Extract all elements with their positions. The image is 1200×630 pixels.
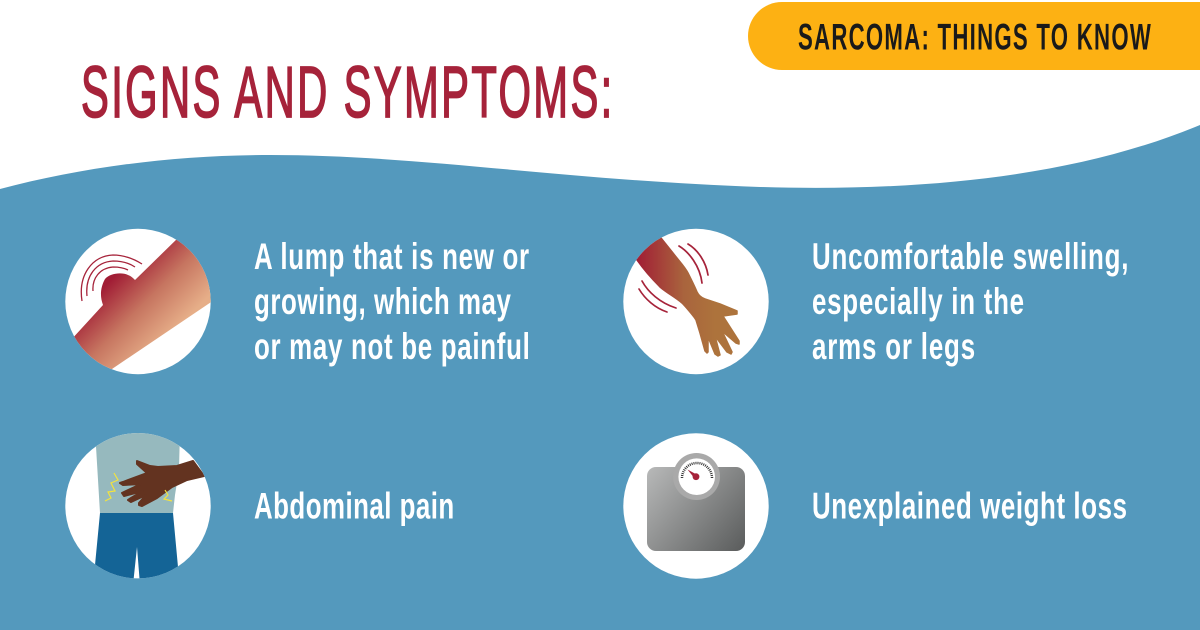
icon: lump on skin bbox=[65, 228, 211, 374]
icon: abdominal pain bbox=[65, 430, 211, 585]
text: swelling: Uncomfortable swelling, bbox=[812, 235, 1128, 277]
title: SIGNS AND SYMPTOMS: bbox=[81, 53, 612, 133]
icon: weight scale bbox=[623, 433, 769, 579]
text: swelling bbox=[812, 235, 1128, 367]
text: lump: growing, which may bbox=[254, 280, 511, 322]
text: lump: A lump that is new or bbox=[254, 235, 529, 277]
icon: swollen arm bbox=[620, 225, 769, 374]
banner: sarcoma things to know: SARCOMA: THINGS TO KNOW bbox=[798, 17, 1151, 58]
text: abdominal pain: Abdominal pain bbox=[254, 485, 454, 527]
text: lump: or may not be painful bbox=[254, 325, 530, 367]
text: swelling: arms or legs bbox=[812, 325, 975, 367]
banner: sarcoma things to know bbox=[748, 2, 1200, 70]
text: lump bbox=[254, 235, 530, 367]
text: swelling: especially in the bbox=[812, 280, 1024, 322]
text: weight loss: Unexplained weight loss bbox=[812, 485, 1127, 527]
